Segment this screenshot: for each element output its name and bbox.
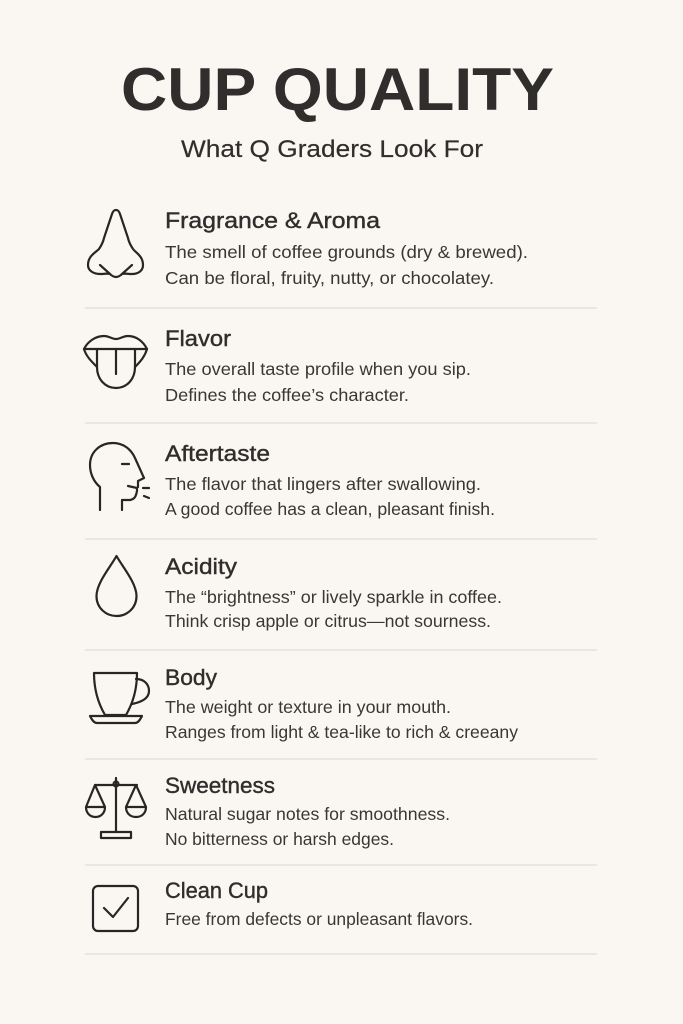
heading: Sweetness xyxy=(165,773,275,798)
icon: tongue xyxy=(84,336,147,388)
row: sweetness xyxy=(86,773,450,849)
row: flavor xyxy=(84,326,471,405)
description xyxy=(165,242,528,288)
description xyxy=(165,587,502,631)
description: Free from defects or unpleasant flavors. xyxy=(165,909,473,929)
description: The weight or texture in your mouth. xyxy=(165,697,451,717)
description xyxy=(165,474,495,519)
description xyxy=(165,804,450,849)
subtitle: What Q Graders Look For xyxy=(181,136,483,163)
heading: Body xyxy=(165,665,217,690)
description xyxy=(165,697,518,742)
title: CUP QUALITY xyxy=(121,56,554,123)
row: body xyxy=(90,665,518,742)
heading: Clean Cup xyxy=(165,878,268,903)
heading: Fragrance & Aroma xyxy=(165,208,381,233)
row: clean cup xyxy=(93,878,473,931)
description: The overall taste profile when you sip. xyxy=(165,359,471,379)
description: The flavor that lingers after swallowing. xyxy=(165,474,481,494)
heading: Acidity xyxy=(165,554,237,579)
description xyxy=(165,359,471,405)
icon: cup and saucer xyxy=(90,673,149,723)
heading: Flavor xyxy=(165,326,231,351)
icon: nose xyxy=(88,210,143,277)
heading: Aftertaste xyxy=(165,441,270,466)
row: acidity xyxy=(96,554,502,631)
description: A good coffee has a clean, pleasant finish. xyxy=(165,499,495,519)
description: Natural sugar notes for smoothness. xyxy=(165,804,450,824)
description: The smell of coffee grounds (dry & brewed). xyxy=(165,242,528,262)
icon: drop xyxy=(96,556,136,616)
description: Defines the coffee’s character. xyxy=(165,385,409,405)
description: The “brightness” or lively sparkle in coffee. xyxy=(165,587,502,607)
icon: head profile xyxy=(90,443,149,510)
icon: checkbox xyxy=(93,886,138,931)
description: No bitterness or harsh edges. xyxy=(165,829,394,849)
row: aftertaste xyxy=(90,441,495,519)
row: fragrance and aroma xyxy=(88,208,528,288)
description: Can be floral, fruity, nutty, or chocolatey. xyxy=(165,268,494,288)
description: Think crisp apple or citrus—not sourness. xyxy=(165,611,491,631)
icon: balance scale xyxy=(86,778,146,838)
description: Ranges from light & tea-like to rich & creeany xyxy=(165,722,518,742)
